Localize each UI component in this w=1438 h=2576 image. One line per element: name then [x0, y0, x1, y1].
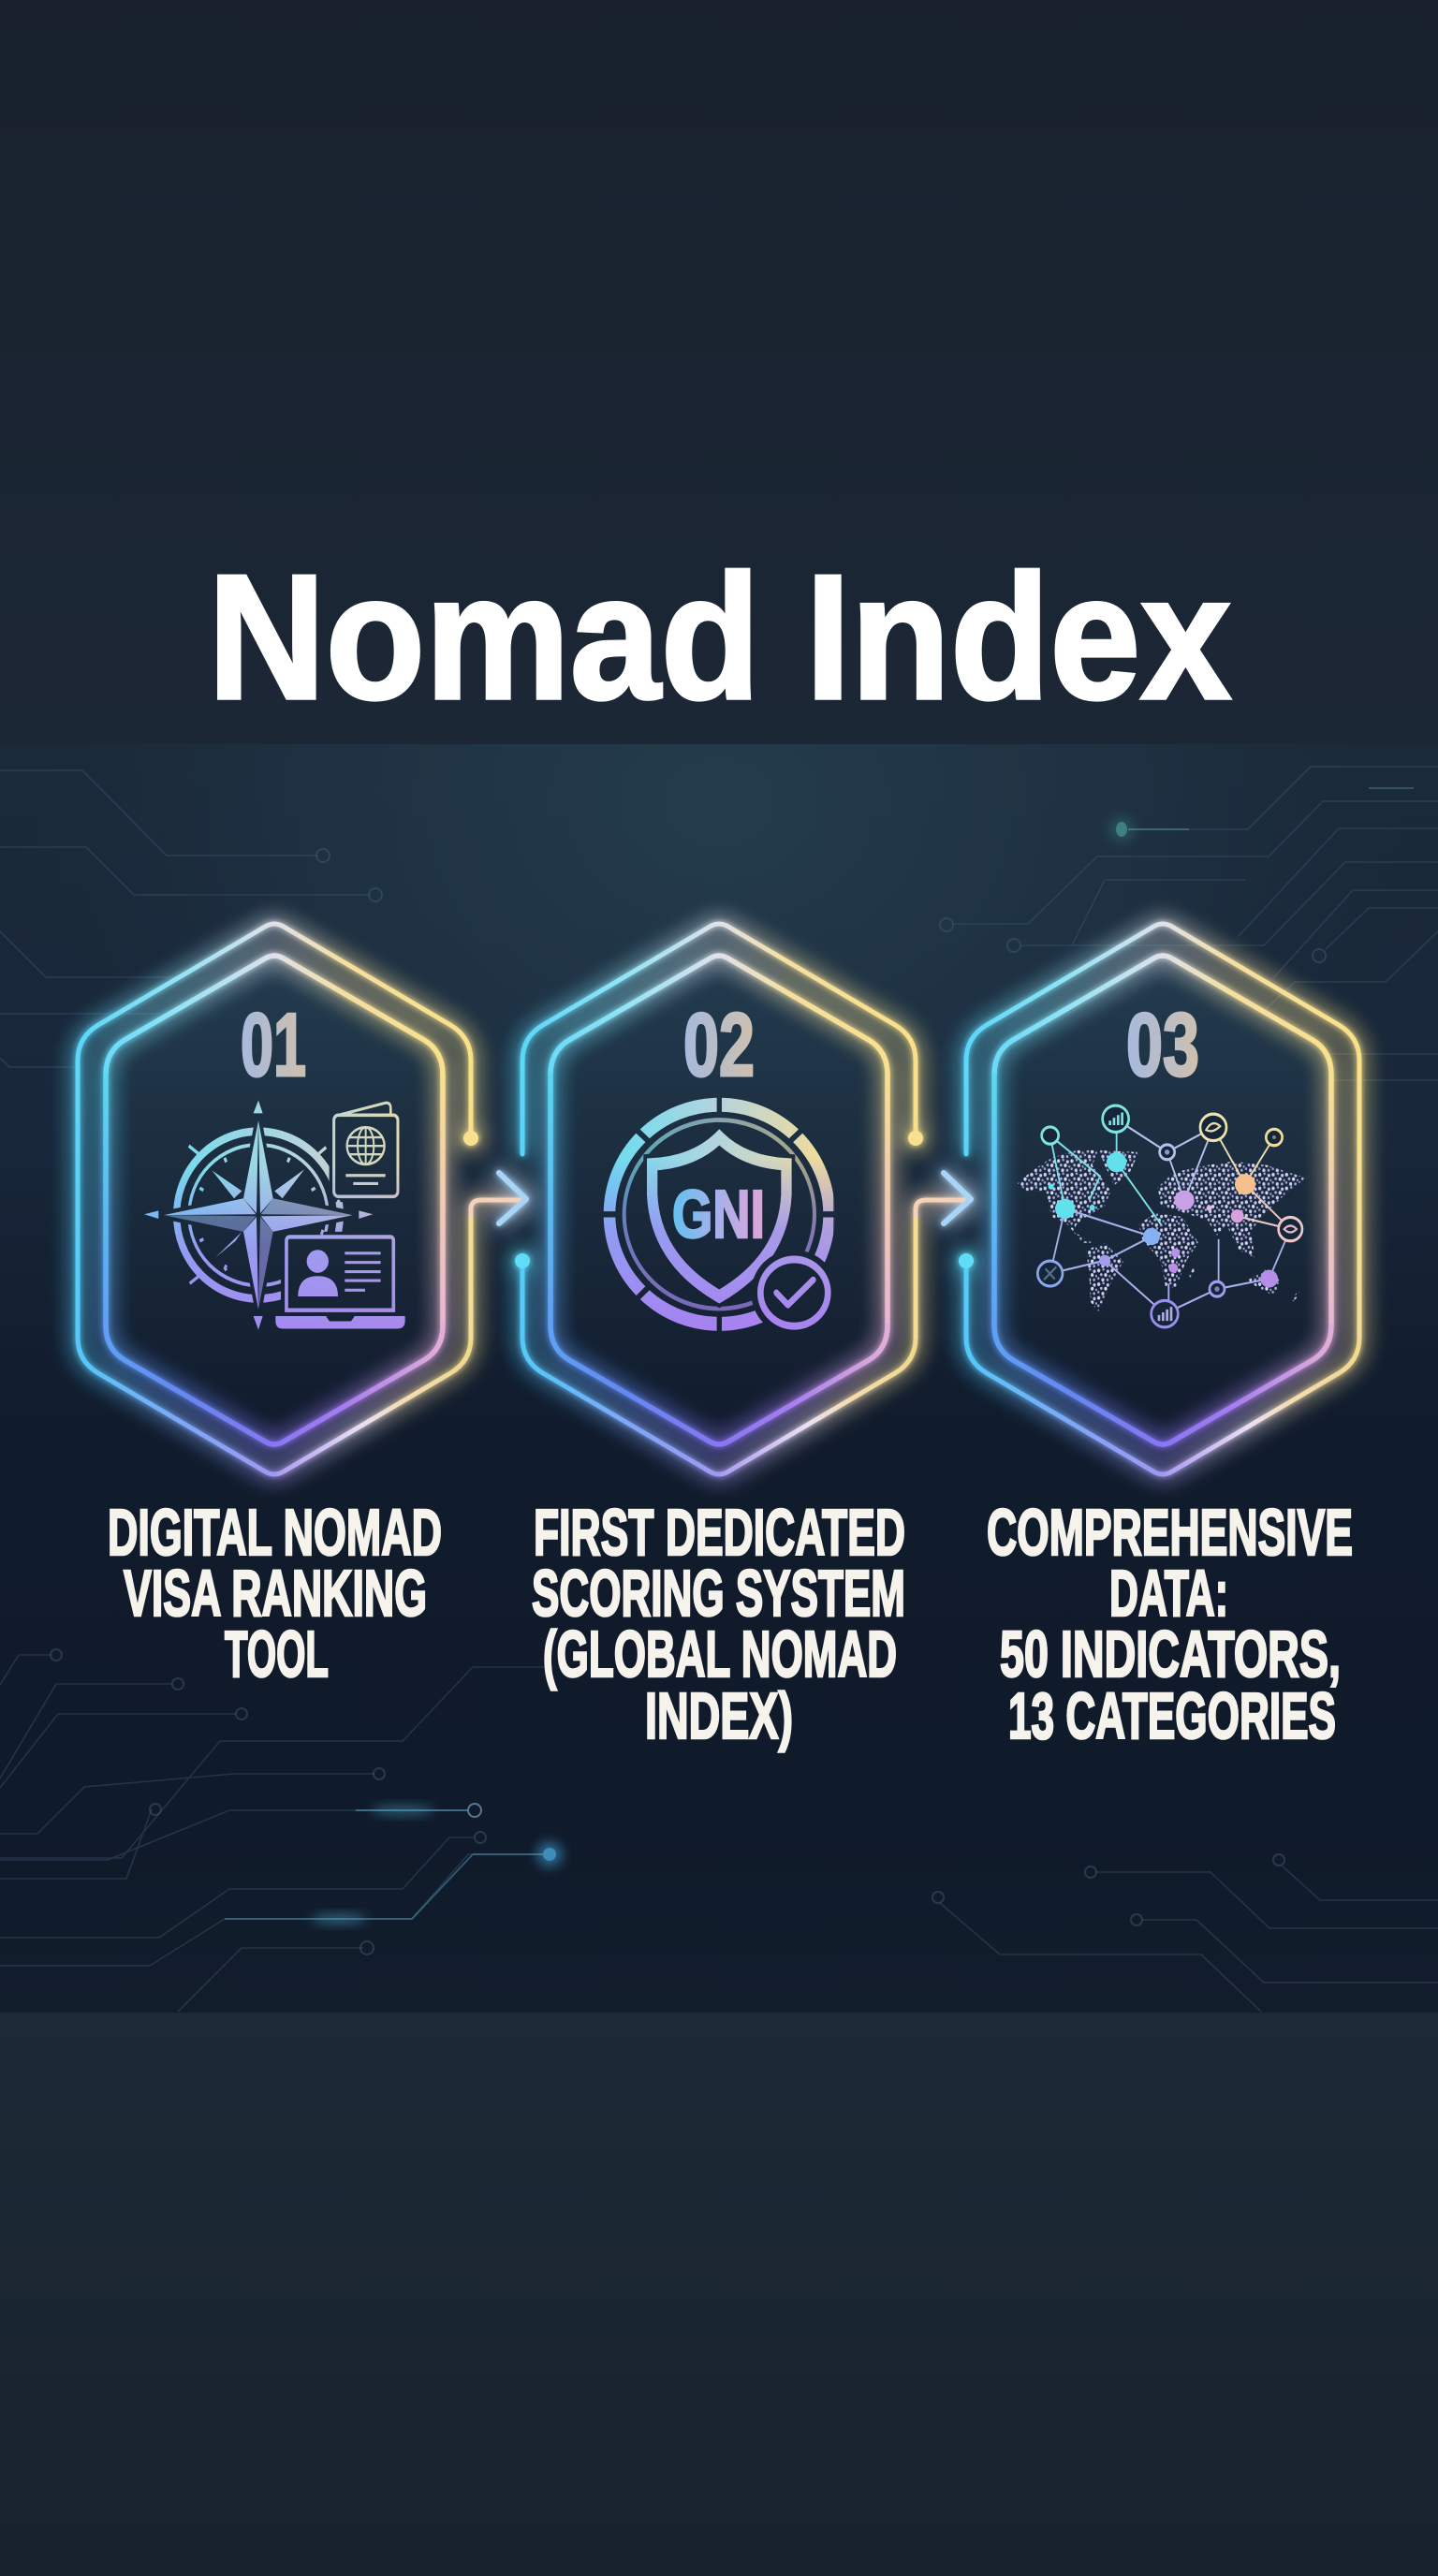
caption: step 3: [987, 1496, 1353, 1752]
shield ring: [599, 1095, 833, 1343]
panel: infographic: [0, 744, 1438, 2012]
panel background: [0, 744, 1438, 2012]
shield lettering: GNI: [672, 1178, 765, 1252]
circuit traces: bottom left: [0, 1649, 563, 2012]
hexagon 2 frame: [522, 924, 916, 1474]
caption: step 1: DIGITAL NOMAD: [108, 1496, 442, 1569]
caption: step 1: TOOL: [225, 1617, 329, 1690]
background: bottom band: [0, 2012, 1438, 2576]
title: Nomad Index: [208, 538, 1231, 737]
background: top band: [0, 0, 1438, 744]
step number 03: 03: [1126, 995, 1199, 1095]
caption: step 1: VISA RANKING: [124, 1557, 427, 1630]
caption: step 3: DATA:: [1109, 1557, 1228, 1630]
caption: step 2: INDEX): [645, 1679, 793, 1752]
circuit traces: top left: [0, 770, 382, 1067]
icon: world network map: [1018, 1105, 1306, 1327]
caption: step 2: SCORING SYSTEM: [532, 1557, 905, 1630]
neon hexagon frames and connectors: [78, 924, 1359, 1474]
hexagon fills: [106, 956, 1331, 1444]
network links: [1050, 1119, 1290, 1314]
circuit traces: top right: [940, 767, 1438, 1080]
arrow: step 2 to 3: [916, 1173, 971, 1223]
icon: GNI shield with ring and check badge: [599, 1095, 833, 1343]
caption: step 2: [532, 1496, 905, 1752]
filled map nodes: [1049, 1152, 1278, 1288]
icon: compass, passport and laptop profile: [144, 1101, 405, 1329]
node dots: [463, 1131, 974, 1268]
step number 01: 01: [241, 995, 306, 1095]
caption: step 2: FIRST DEDICATED: [534, 1496, 905, 1569]
circuit traces: bottom right: [932, 1854, 1438, 2012]
hexagon 3 frame: [966, 924, 1359, 1474]
caption: step 2: (GLOBAL NOMAD: [543, 1617, 897, 1690]
step number 02: 02: [683, 995, 755, 1095]
node glyphs: [1044, 1113, 1297, 1321]
arrow: step 1 to 2: [471, 1173, 526, 1223]
caption: step 1: [108, 1496, 442, 1690]
hexagon 1 frame: [78, 924, 471, 1474]
dotted continents: [1018, 1150, 1306, 1311]
ringed category nodes: [1037, 1105, 1302, 1327]
